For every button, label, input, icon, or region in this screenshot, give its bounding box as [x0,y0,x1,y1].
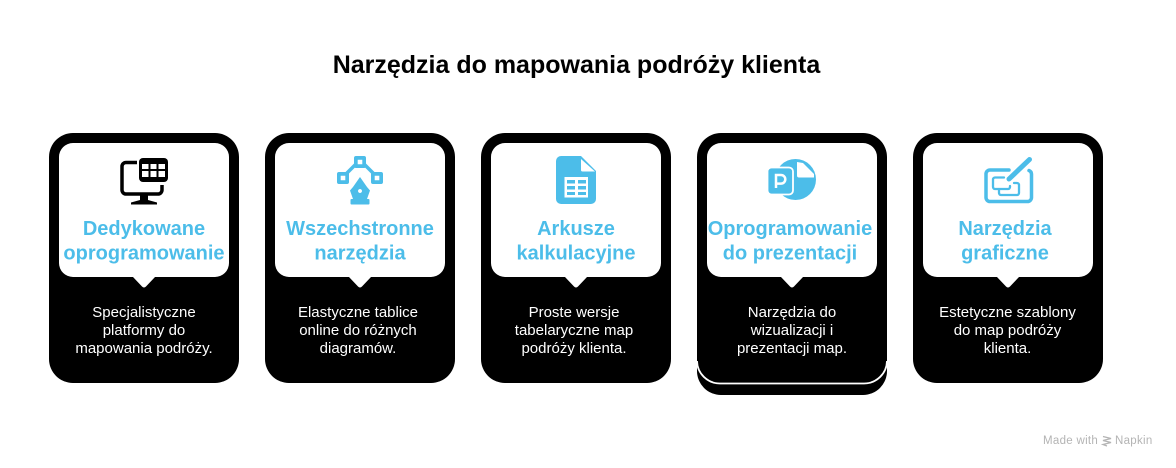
heading: Arkusze [537,218,615,240]
icon: spreadsheet file [556,156,596,204]
description: diagramów. [320,340,396,357]
panel: narzędzia graficzne [913,133,1103,383]
heading: Wszechstronne [286,218,434,240]
heading: oprogramowanie [63,242,225,264]
heading: graficzne [961,242,1049,264]
description: Narzędzia do [748,304,836,321]
panel: oprogramowanie do prezentacji [697,133,887,395]
panel: dedykowane oprogramowanie [49,133,239,383]
panel: arkusze kalkulacyjne [481,133,671,383]
description: wizualizacji i [750,322,833,339]
icon: napkin logo [1103,436,1111,446]
description: tabelaryczne map [515,322,633,339]
heading: Narzędzia [958,218,1053,240]
heading: Oprogramowanie [708,218,872,240]
description: Proste wersje [529,304,619,321]
icon: presentation pie [768,159,816,200]
description: podróży klienta. [521,340,627,357]
heading: do prezentacji [723,242,857,264]
description: Specjalistyczne [92,304,196,321]
heading: kalkulacyjne [517,242,635,264]
description: online do różnych [299,322,417,339]
watermark: Made with Napkin: Made with [1043,435,1098,447]
title: Narzędzia do mapowania podróży klienta [333,51,821,79]
description: prezentacji map. [737,340,847,357]
icon: vector pen [337,156,383,204]
icon: monitor with table [122,158,168,204]
watermark: Made with Napkin [1043,435,1153,447]
description: Elastyczne tablice [298,304,418,321]
icon: drawing tablet with pen [986,160,1032,202]
heading: Dedykowane [83,218,205,240]
watermark: Made with Napkin: Napkin [1115,435,1153,447]
description: mapowania podróży. [75,340,213,357]
description: do map podróży [954,322,1062,339]
description: klienta. [984,340,1031,357]
heading: narzędzia [314,242,406,264]
description: Estetyczne szablony [939,304,1076,321]
description: platformy do [103,322,185,339]
panel: wszechstronne narzędzia [265,133,455,383]
